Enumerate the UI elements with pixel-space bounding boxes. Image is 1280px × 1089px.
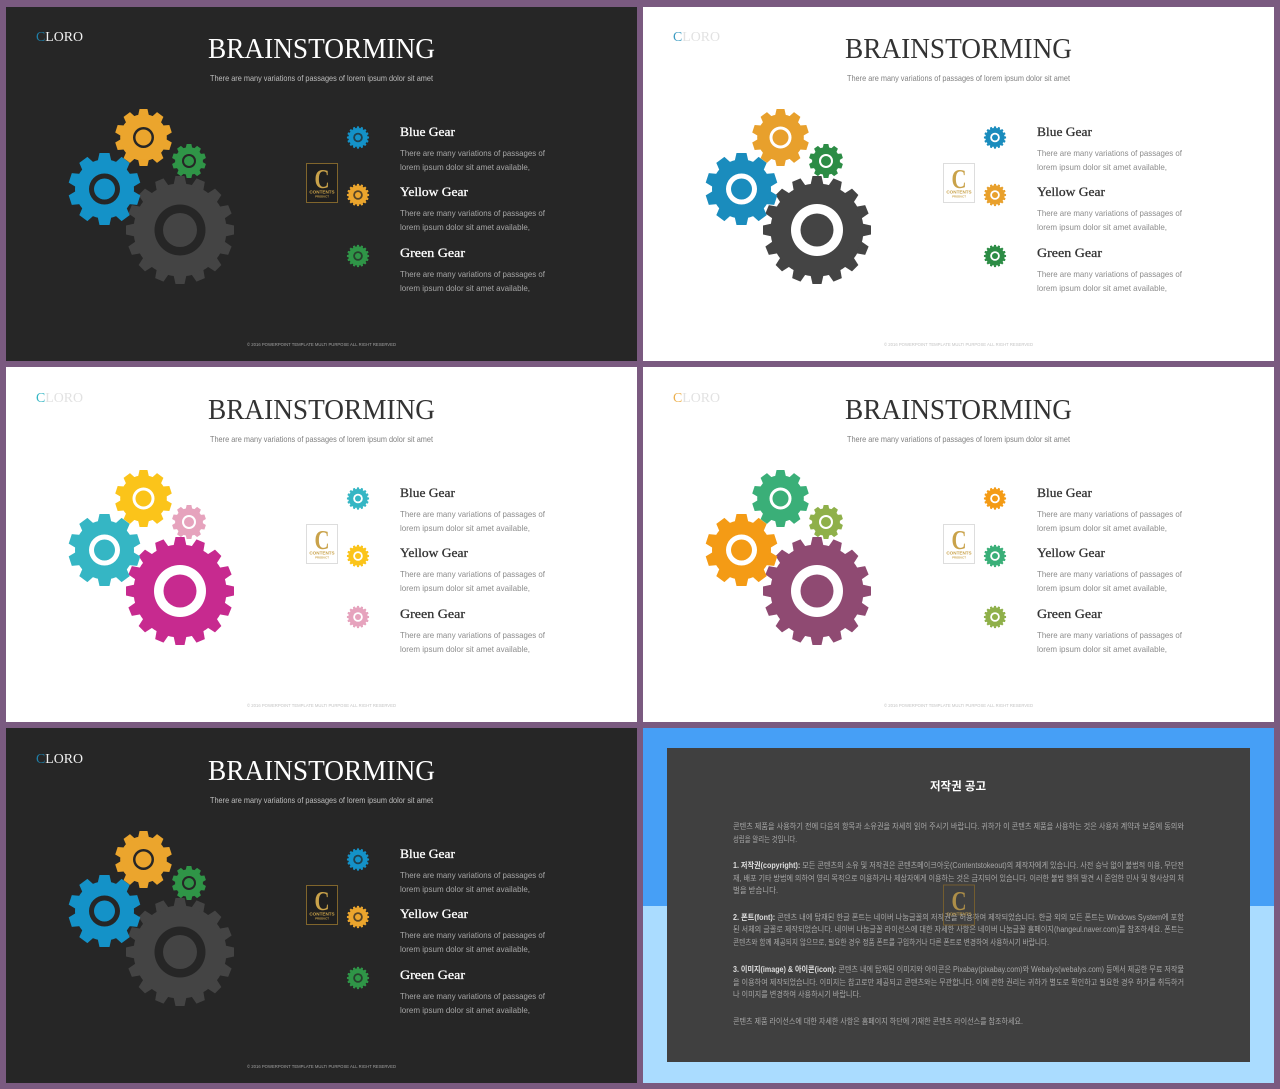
item: yellow gear [347, 184, 546, 232]
item: yellow gear [347, 906, 546, 954]
item: blue gear [347, 486, 546, 533]
logo: CLORO [36, 30, 83, 45]
item: yellow gear: There are many variations of passages of [1037, 569, 1183, 579]
badge [306, 886, 338, 924]
blue gear [705, 153, 778, 225]
item: blue gear: lorem ipsum dolor sit amet available, [1037, 523, 1167, 533]
yellow gear [115, 831, 172, 888]
badge [306, 524, 338, 564]
item: green gear: Green Gear [400, 968, 466, 982]
panel: copyright notice [643, 728, 1274, 1083]
badge: PRODUCT [952, 556, 966, 560]
gear cluster [68, 470, 234, 645]
badge [944, 885, 974, 925]
green gear [172, 144, 206, 178]
subtitle: There are many variations of passages of lorem ipsum dolor sit amet [210, 73, 434, 83]
item: green gear: Green Gear [1037, 246, 1103, 260]
pink gear [172, 505, 206, 539]
badge: CONTENTS [309, 912, 335, 916]
section 2: font [733, 912, 1185, 947]
gear cluster [68, 831, 234, 1006]
item: yellow gear: There are many variations of passages of [400, 208, 546, 218]
footer: © 2016 POWERPOINT TEMPLATE MULTI PURPOSE ALL RIGHT RESERVED [247, 702, 397, 708]
big grey gear [763, 176, 871, 284]
section 3: image and icon: 3. 이미지(image) & 아이콘(icon): 콘텐츠 내에 탑재된 이미지와 아이콘은 Pixabay(pixabay.com)와 Webalys(webalys.com) 등에서 제공한 무료 저작물 [733, 964, 1184, 974]
badge [944, 524, 974, 564]
badge: C [314, 525, 330, 555]
intro paragraph [733, 821, 1185, 844]
title: BRAINSTORMING [208, 756, 435, 787]
title: BRAINSTORMING [845, 34, 1072, 65]
title: BRAINSTORMING [208, 395, 435, 426]
item: green gear: lorem ipsum dolor sit amet available, [400, 644, 530, 654]
section 1: copyright [733, 860, 1184, 895]
logo: CLORO [673, 30, 720, 45]
notice title: 저작권 공고 [930, 779, 986, 793]
item: green gear: Green Gear [1037, 607, 1103, 621]
logo: CLORO [673, 391, 720, 406]
big plum gear [763, 537, 871, 645]
item: blue gear [347, 125, 546, 172]
item: blue gear: lorem ipsum dolor sit amet available, [400, 523, 530, 533]
item: green gear [347, 606, 546, 654]
item: green gear: There are many variations of passages of [1037, 269, 1183, 279]
yellow gear [115, 109, 172, 166]
item: blue gear: There are many variations of passages of [400, 870, 546, 880]
item: green gear [984, 606, 1183, 654]
section 1: copyright: 벌을 받습니다. [733, 885, 778, 895]
item: green gear: lorem ipsum dolor sit amet available, [1037, 283, 1167, 293]
subtitle: There are many variations of passages of lorem ipsum dolor sit amet [847, 434, 1071, 444]
section 1: copyright: 1. 저작권(copyright): 모든 콘텐츠의 소유 및 저작권은 콘텐츠메이크아웃(Contentstokeout)의 제작자에게 있습니다. 사전 승낙 없이 불법적 이용, 무단전 [733, 860, 1184, 870]
item: yellow gear: Yellow Gear [400, 907, 469, 921]
item: green gear: There are many variations of passages of [400, 269, 546, 279]
item: yellow gear: Yellow Gear [1037, 546, 1106, 560]
item: blue gear: There are many variations of passages of [1037, 148, 1183, 158]
item: green gear: Green Gear [400, 607, 466, 621]
item: green gear: Green Gear [400, 246, 466, 260]
item: green gear: There are many variations of passages of [400, 630, 546, 640]
big magenta gear [126, 537, 234, 645]
item: yellow gear: lorem ipsum dolor sit amet available, [400, 222, 530, 232]
badge: CONTENTS [946, 190, 972, 194]
item: blue gear [347, 847, 546, 894]
blue gear [68, 875, 141, 947]
badge: C [952, 525, 966, 555]
item: blue gear: Blue Gear [1037, 125, 1093, 139]
item: blue gear: Blue Gear [400, 486, 456, 500]
item: green gear: lorem ipsum dolor sit amet available, [1037, 644, 1167, 654]
panel: white slide magenta theme [6, 367, 637, 722]
footer: © 2016 POWERPOINT TEMPLATE MULTI PURPOSE ALL RIGHT RESERVED [884, 702, 1034, 708]
badge: PRODUCT [315, 556, 329, 560]
title: BRAINSTORMING [845, 395, 1072, 426]
item: yellow gear: There are many variations of passages of [400, 930, 546, 940]
item: yellow gear: lorem ipsum dolor sit amet available, [400, 583, 530, 593]
item: blue gear: There are many variations of passages of [400, 148, 546, 158]
item: yellow gear: lorem ipsum dolor sit amet available, [1037, 583, 1167, 593]
item: blue gear [984, 486, 1183, 533]
item: yellow gear: Yellow Gear [400, 546, 469, 560]
section 3: image and icon [733, 964, 1184, 999]
badge [944, 164, 974, 202]
blue gear [68, 153, 141, 225]
title: BRAINSTORMING [208, 34, 435, 65]
green gear [172, 866, 206, 900]
subtitle: There are many variations of passages of lorem ipsum dolor sit amet [847, 73, 1071, 83]
badge: CONTENTS [946, 912, 972, 916]
olive gear [809, 505, 843, 539]
item: yellow gear: Yellow Gear [1037, 185, 1106, 199]
item: yellow gear [984, 184, 1183, 232]
yellow gear [752, 109, 809, 166]
section 2: font: 된 서체의 글꼴로 제작되었습니다. 네이버 나눔글꼴 라이선스에 대한 자세한 사항은 네이버 나눔글꼴 홈페이지(hangeul.naver.com)를 참조하세요. 폰트는 [733, 924, 1184, 934]
orange gear [705, 514, 778, 586]
item: blue gear: lorem ipsum dolor sit amet available, [400, 162, 530, 172]
item: blue gear [984, 125, 1183, 172]
item: blue gear: Blue Gear [1037, 486, 1093, 500]
green gear [752, 470, 809, 527]
panel: dark slide bottom left [6, 728, 637, 1083]
item: blue gear: Blue Gear [400, 125, 456, 139]
panel: dark slide top left [6, 7, 637, 361]
gear cluster [705, 109, 871, 284]
logo: CLORO [36, 752, 83, 767]
badge: C [314, 164, 330, 194]
item: yellow gear: lorem ipsum dolor sit amet available, [400, 944, 530, 954]
item: yellow gear: lorem ipsum dolor sit amet available, [1037, 222, 1167, 232]
badge: PRODUCT [952, 194, 966, 198]
section 2: font: 콘텐츠와 함께 제공되지 않으므로, 필요한 경우 정품 폰트를 구입하거나 다른 폰트로 변경하여 사용하시기 바랍니다. [733, 937, 1049, 947]
badge: C [952, 164, 966, 194]
item: blue gear: lorem ipsum dolor sit amet available, [400, 884, 530, 894]
item: blue gear: lorem ipsum dolor sit amet available, [1037, 162, 1167, 172]
item: blue gear: There are many variations of passages of [400, 509, 546, 519]
logo: CLORO [36, 391, 83, 406]
yellow gear [115, 470, 172, 527]
badge: C [952, 886, 966, 916]
item: green gear [347, 245, 546, 293]
item: blue gear: Blue Gear [400, 847, 456, 861]
gear cluster [705, 470, 871, 645]
item: green gear [984, 245, 1183, 293]
badge: PRODUCT [315, 194, 329, 198]
item: yellow gear: Yellow Gear [400, 185, 469, 199]
item: green gear: There are many variations of passages of [1037, 630, 1183, 640]
badge [306, 164, 338, 202]
item: blue gear: There are many variations of passages of [1037, 509, 1183, 519]
badge: PRODUCT [315, 916, 329, 920]
intro paragraph: 성립을 알리는 것입니다. [733, 834, 797, 844]
panel: white slide top right [643, 7, 1274, 361]
footer: © 2016 POWERPOINT TEMPLATE MULTI PURPOSE ALL RIGHT RESERVED [884, 341, 1034, 347]
section 1: copyright: 재, 배포 기타 방법에 의하여 영리 목적으로 이용하거나 제삼자에게 이용하는 것은 금지되어 있습니다. 이러한 불법 행위 발견 시 준엄한 민사 및 형사상의 처 [733, 873, 1184, 883]
gear cluster [68, 109, 234, 284]
badge: CONTENTS [309, 190, 335, 194]
green gear [809, 144, 843, 178]
badge: C [314, 886, 330, 916]
subtitle: There are many variations of passages of lorem ipsum dolor sit amet [210, 795, 434, 805]
footer: © 2016 POWERPOINT TEMPLATE MULTI PURPOSE ALL RIGHT RESERVED [247, 1063, 397, 1069]
item: yellow gear [347, 545, 546, 593]
badge: CONTENTS [946, 550, 972, 556]
item: green gear: There are many variations of passages of [400, 991, 546, 1001]
subtitle: There are many variations of passages of lorem ipsum dolor sit amet [210, 434, 434, 444]
closing note: 콘텐츠 제품 라이선스에 대한 자세한 사항은 홈페이지 하단에 기재한 콘텐츠 라이선스를 참조하세요. [733, 1016, 1023, 1026]
section 3: image and icon: 을 이용하여 제작되었습니다. 이미지는 참고로만 제공되고 콘텐츠와는 무관합니다. 이에 관한 권리는 귀하가 별도로 확인하고 필요한 경우 허가를 취득하거 [733, 977, 1184, 987]
panel: white slide plum theme [643, 367, 1274, 722]
intro paragraph: 콘텐츠 제품을 사용하기 전에 다음의 항목과 소유권을 자세히 읽어 주시기 바랍니다. 귀하가 이 콘텐츠 제품을 사용하는 것은 사용자 계약과 보증에 동의와 [733, 821, 1185, 831]
item: green gear: lorem ipsum dolor sit amet available, [400, 283, 530, 293]
item: green gear: lorem ipsum dolor sit amet available, [400, 1005, 530, 1015]
item: green gear [347, 967, 546, 1015]
big grey gear [126, 898, 234, 1006]
footer: © 2016 POWERPOINT TEMPLATE MULTI PURPOSE ALL RIGHT RESERVED [247, 341, 397, 347]
item: yellow gear: There are many variations of passages of [400, 569, 546, 579]
section 3: image and icon: 나 이미지를 변경하여 사용하시기 바랍니다. [733, 989, 861, 999]
big grey gear [126, 176, 234, 284]
section 2: font: 2. 폰트(font): 콘텐츠 내에 탑재된 한글 폰트는 네이버 나눔글꼴의 저작권을 허용하여 제작되었습니다. 한글 외의 모든 폰트는 Windows System에 포함 [733, 912, 1185, 922]
teal gear [68, 514, 141, 586]
item: yellow gear: There are many variations of passages of [1037, 208, 1183, 218]
badge: CONTENTS [309, 550, 335, 556]
item: yellow gear [984, 545, 1183, 593]
